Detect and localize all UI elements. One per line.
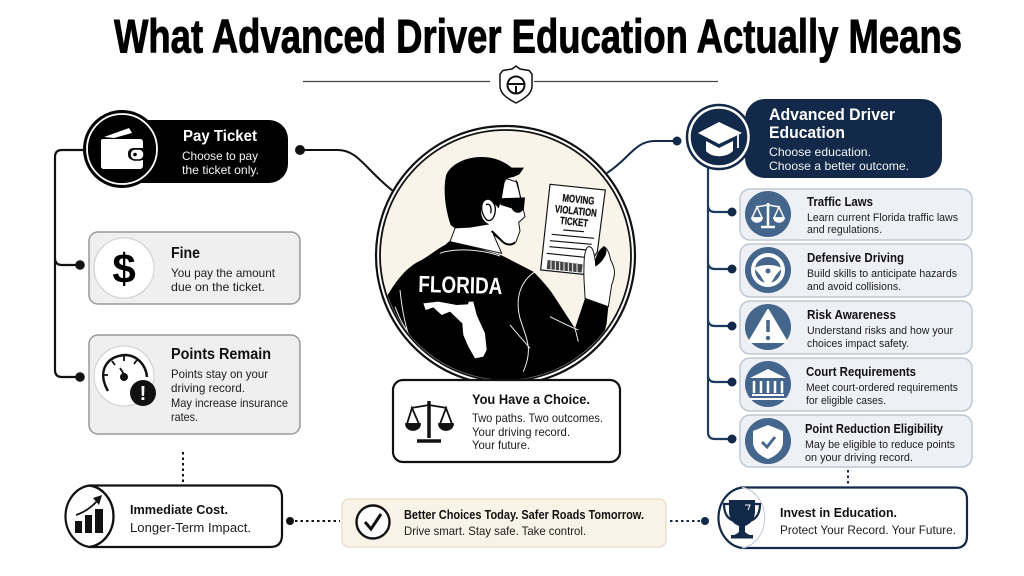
text: defensive driving description: and avoid collisions. xyxy=(807,281,901,293)
text: choice description: Your future. xyxy=(472,438,530,452)
icon: graduation cap xyxy=(687,105,751,169)
text: education description: Choose a better outcome. xyxy=(769,159,909,173)
text: traffic laws description: and regulations. xyxy=(807,224,882,236)
heading: invest in education: Invest in Education. xyxy=(780,505,897,520)
florida map xyxy=(423,302,487,358)
panel: risk awareness xyxy=(740,301,972,354)
ticket xyxy=(541,184,605,274)
text: defensive driving description: Build skills to anticipate hazards xyxy=(807,268,957,280)
panel: fine xyxy=(89,232,300,304)
heading: immediate cost: Immediate Cost. xyxy=(130,502,228,517)
text: education description xyxy=(769,145,909,173)
text: point reduction description: on your driving record. xyxy=(805,452,913,464)
text: points description: rates. xyxy=(171,410,198,424)
text: fine description xyxy=(171,266,276,294)
text: choice description xyxy=(472,411,603,452)
text: points description: May increase insurance xyxy=(171,396,288,410)
ticket: VIOLATION xyxy=(554,203,597,220)
text: points description: driving record. xyxy=(171,381,245,395)
icon: courthouse xyxy=(745,361,791,407)
heading: better choices: Better Choices Today. Safer Roads Tomorrow. xyxy=(404,508,644,522)
ear xyxy=(482,199,495,221)
heading: point reduction eligibility: Point Reduction Eligibility xyxy=(805,421,944,436)
text: pay ticket description: Choose to pay xyxy=(182,149,258,163)
illustration: driver in circle reading ticket xyxy=(376,126,635,385)
icon: scales xyxy=(745,191,791,237)
heading: points remain: Points Remain xyxy=(171,346,271,363)
panel: defensive driving xyxy=(740,244,972,297)
text: choice description: Two paths. Two outcomes. xyxy=(472,411,603,425)
text: point reduction description xyxy=(805,439,955,464)
heading: advanced driver education: Advanced Driver xyxy=(769,106,896,124)
heading: traffic laws: Traffic Laws xyxy=(807,194,873,209)
text: fine description: You pay the amount xyxy=(171,266,276,280)
text: pay ticket description: the ticket only. xyxy=(182,163,259,177)
heading: advanced driver education xyxy=(769,106,896,142)
icon: steering wheel xyxy=(745,247,791,293)
panel: traffic laws xyxy=(740,189,972,240)
text: risk awareness description xyxy=(807,325,953,350)
heading: advanced driver education: Education xyxy=(769,124,845,142)
heading: defensive driving: Defensive Driving xyxy=(807,250,904,265)
heading: court requirements: Court Requirements xyxy=(806,364,916,379)
connector: pay ticket path to items xyxy=(55,150,88,382)
hair xyxy=(445,157,524,228)
hand xyxy=(584,247,614,307)
icon: gauge with warning: ! xyxy=(140,383,146,405)
ticket: TICKET xyxy=(559,215,589,230)
text: defensive driving description xyxy=(807,268,957,293)
text: traffic laws description xyxy=(807,212,958,236)
neck and face xyxy=(450,178,525,253)
panel: advanced driver education xyxy=(687,99,942,178)
icon: warning triangle xyxy=(745,304,791,350)
dotted connectors xyxy=(183,452,848,521)
text: point reduction description: May be eligible to reduce points xyxy=(805,439,955,451)
jacket lettering: FLORIDA xyxy=(418,271,503,299)
text: immediate cost description: Longer-Term Impact. xyxy=(130,520,251,535)
text: court requirements description: Meet court-ordered requirements xyxy=(806,382,958,394)
connector dot: left xyxy=(286,517,294,525)
connector: education to center xyxy=(607,136,682,173)
icon: gauge with warning xyxy=(94,346,156,406)
icon: dollar xyxy=(94,238,154,298)
text: traffic laws description: Learn current Florida traffic laws xyxy=(807,212,958,224)
heading: pay ticket: Pay Ticket xyxy=(183,128,258,145)
heading: fine: Fine xyxy=(171,245,200,262)
panel: point reduction eligibility xyxy=(740,415,972,467)
panel: you have a choice xyxy=(393,380,620,462)
panel: points remain xyxy=(89,335,300,434)
text: points description xyxy=(171,367,288,424)
text: risk awareness description: Understand risks and how your xyxy=(807,325,953,337)
text: fine description: due on the ticket. xyxy=(171,280,265,294)
text: points description: Points stay on your xyxy=(171,367,268,381)
connector: education path to items xyxy=(708,165,736,444)
text: risk awareness description: choices impact safety. xyxy=(807,338,909,350)
icon: rising bar chart xyxy=(75,486,117,548)
icon: dollar: $ xyxy=(112,245,136,292)
text: choice description: Your driving record. xyxy=(472,425,570,439)
jacket xyxy=(380,241,608,382)
icon: check circle xyxy=(356,506,390,538)
text: pay ticket description xyxy=(182,149,259,177)
connector dot: right xyxy=(701,517,709,525)
panel: invest in education xyxy=(718,488,967,548)
panel: court requirements xyxy=(740,358,972,411)
ticket: MOVING xyxy=(562,192,595,208)
icon: trophy xyxy=(724,488,765,548)
text: invest description: Protect Your Record. Your Future. xyxy=(780,523,956,537)
icon: scales xyxy=(406,401,453,441)
connector: pay ticket to center xyxy=(295,145,393,191)
text: education description: Choose education. xyxy=(769,145,871,159)
heading: you have a choice: You Have a Choice. xyxy=(472,391,590,407)
icon: shield check xyxy=(745,418,791,464)
head xyxy=(445,157,525,253)
title divider with shield icon xyxy=(303,66,718,103)
panel: immediate cost xyxy=(65,486,282,548)
heading: risk awareness: Risk Awareness xyxy=(807,307,896,322)
text: better choices description: Drive smart. Stay safe. Take control. xyxy=(404,524,586,538)
panel: better choices xyxy=(342,499,666,547)
text: court requirements description: for eligible cases. xyxy=(806,395,886,407)
sunglasses xyxy=(498,197,525,213)
icon: wallet xyxy=(83,110,161,188)
jacket seams xyxy=(395,250,578,372)
text: court requirements description xyxy=(806,382,958,407)
panel: pay ticket xyxy=(83,110,288,188)
